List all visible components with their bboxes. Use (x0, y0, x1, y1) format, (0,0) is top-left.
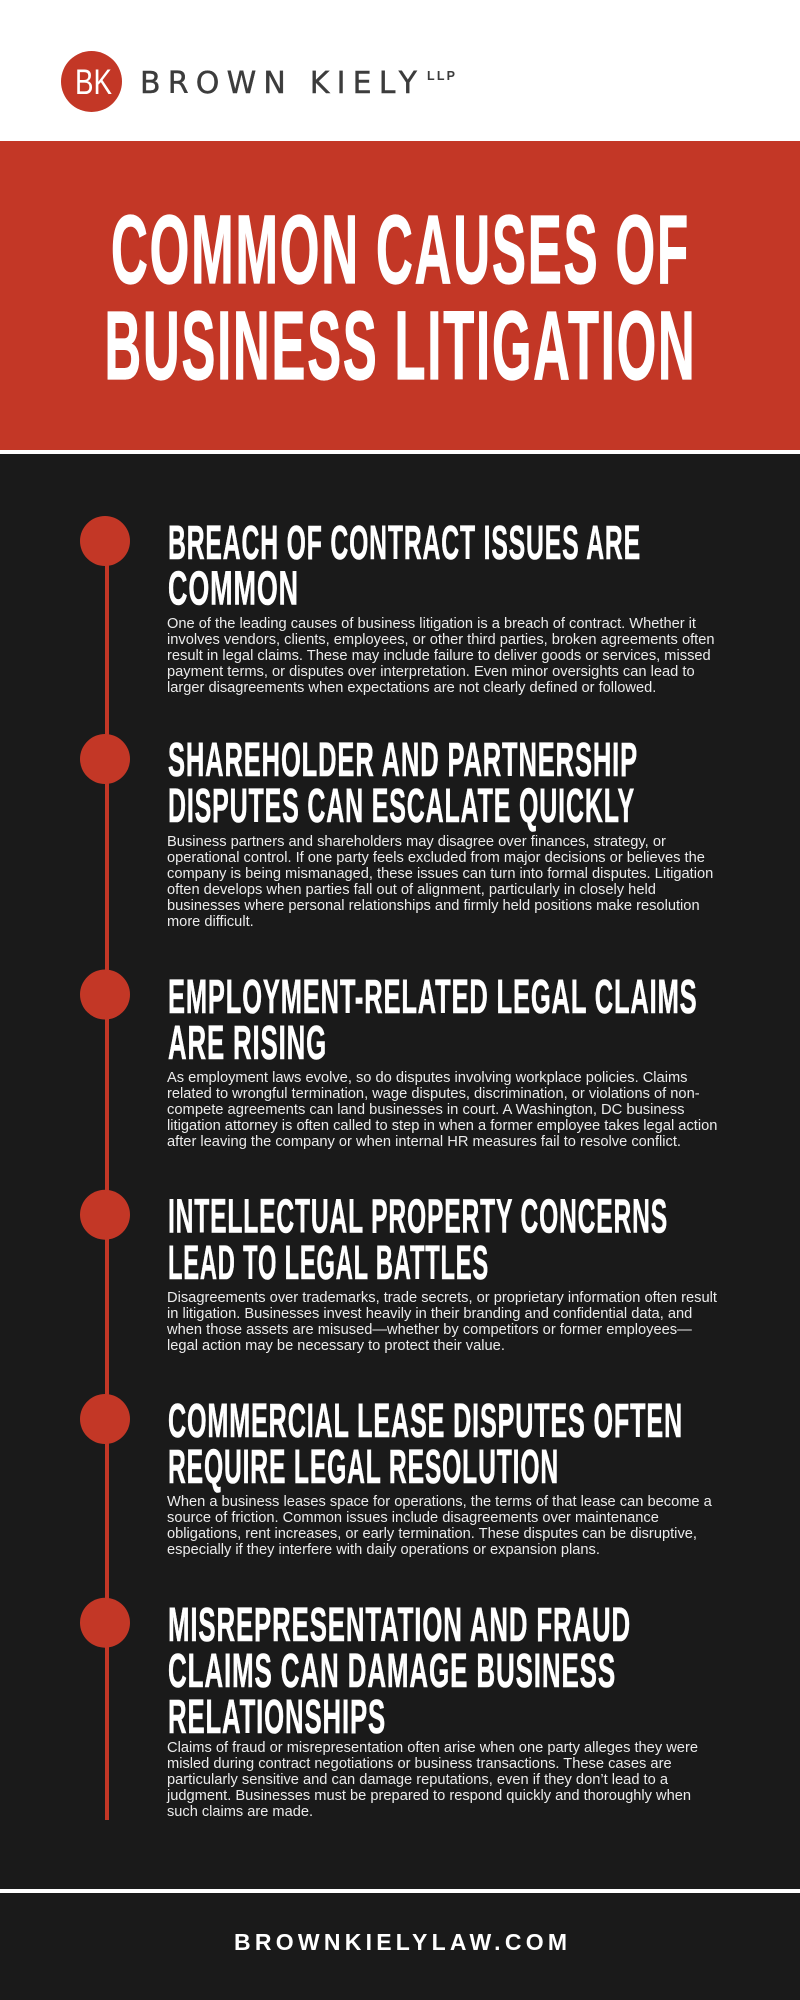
item 2: shareholder disputes (80, 734, 713, 930)
body text 1: involves vendors, clients, employees, or other third parties, broken agreements often (167, 632, 714, 648)
body text 6: misled during contract negotiations or business transactions. These cases are (167, 1756, 672, 1772)
body text 2: Business partners and shareholders may disagree over finances, strategy, or (167, 834, 666, 850)
header: logo band (0, 0, 800, 141)
timeline marker 5 (80, 1394, 130, 1444)
body text 3 (167, 1070, 717, 1150)
body text 3: As employment laws evolve, so do disputes involving workplace policies. Claims (167, 1070, 688, 1086)
body text 5: When a business leases space for operations, the terms of that lease can become a (167, 1494, 713, 1510)
body text 6 (166, 1740, 698, 1820)
body text 6: particularly sensitive and can damage reputations, even if they don’t lead to a (167, 1772, 669, 1788)
item 4: intellectual property (80, 1190, 717, 1354)
body text 1: larger disagreements when expectations are not clearly defined or followed. (167, 680, 656, 696)
title banner (0, 141, 800, 450)
item 5: commercial lease (80, 1394, 713, 1558)
timeline marker 1 (80, 516, 130, 566)
heading 4 (168, 1191, 668, 1290)
item 3: employment claims (80, 970, 717, 1150)
heading 6: RELATIONSHIPS (168, 1691, 386, 1744)
footer (0, 1893, 800, 2000)
body text 4: in litigation. Businesses invest heavily in their branding and confidential data, and (167, 1306, 692, 1322)
body text 6: judgment. Businesses must be prepared to respond quickly and thoroughly when (166, 1788, 691, 1804)
body text 5: obligations, rent increases, or early termination. These disputes can be disruptive, (167, 1526, 697, 1542)
body text 2: company is being mismanaged, these issues can turn into formal disputes. Litigation (167, 866, 713, 882)
heading 1: COMMON (168, 562, 299, 616)
item 1: breach of contract (80, 516, 714, 696)
body text 2: more difficult. (167, 914, 254, 930)
body text 1: payment terms, or disputes over interpretation. Even minor oversights can lead to (167, 664, 695, 680)
body text 3: after leaving the company or when internal HR measures fail to resolve conflict. (167, 1134, 681, 1150)
body text 1 (167, 616, 714, 696)
logo suffix: LLP (427, 69, 455, 83)
heading 2 (168, 734, 638, 833)
timeline marker 6 (80, 1598, 130, 1648)
footer website: BROWNKIELYLAW.COM (234, 1929, 567, 1955)
icon: BK logo badge: BK (75, 63, 112, 102)
logo wordmark: BROWN KIELY (140, 66, 418, 101)
panel: timeline section (0, 454, 800, 1889)
body text 4: when those assets are misused—whether by competitors or former employees— (166, 1322, 692, 1338)
body text 6: Claims of fraud or misrepresentation often arise when one party alleges they were (167, 1740, 698, 1756)
timeline marker 2 (80, 734, 130, 784)
body text 2: operational control. If one party feels excluded from major decisions or believes the (167, 850, 705, 866)
heading 3 (168, 971, 698, 1070)
heading 3: ARE RISING (168, 1017, 327, 1070)
body text 1: One of the leading causes of business litigation is a breach of contract. Whether it (167, 616, 696, 632)
body text 4: Disagreements over trademarks, trade secrets, or proprietary information often result (167, 1290, 717, 1306)
body text 4 (166, 1290, 717, 1354)
body text 5: especially if they interfere with daily operations or expansion plans. (167, 1542, 600, 1558)
body text 4: legal action may be necessary to protect their value. (167, 1338, 505, 1354)
icon: BK logo badge (61, 51, 122, 112)
heading 6 (168, 1599, 631, 1744)
timeline line (105, 541, 109, 1820)
body text 2 (167, 834, 713, 930)
heading 4: LEAD TO LEGAL BATTLES (168, 1237, 489, 1290)
body text 3: litigation attorney is often called to step in when a former employee takes legal action (167, 1118, 717, 1134)
heading 5 (168, 1395, 683, 1494)
heading 1 (168, 517, 641, 616)
body text 6: such claims are made. (167, 1804, 313, 1820)
body text 5 (167, 1494, 713, 1558)
body text 1: result in legal claims. These may include failure to deliver goods or services, missed (167, 648, 711, 664)
title (104, 195, 696, 400)
body text 3: compete agreements can land businesses in court. A Washington, DC business (167, 1102, 684, 1118)
timeline marker 4 (80, 1190, 130, 1240)
body text 5: source of friction. Common issues include disagreements over maintenance (167, 1510, 659, 1526)
body text 2: often develops when parties fall out of alignment, particularly in closely held (167, 882, 656, 898)
item 6: misrepresentation and fraud (80, 1598, 698, 1820)
body text 3: related to wrongful termination, wage disputes, discrimination, or violations of non- (167, 1086, 700, 1102)
body text 2: businesses where personal relationships and firmly held positions make resolution (167, 898, 700, 914)
timeline marker 3 (80, 970, 130, 1020)
